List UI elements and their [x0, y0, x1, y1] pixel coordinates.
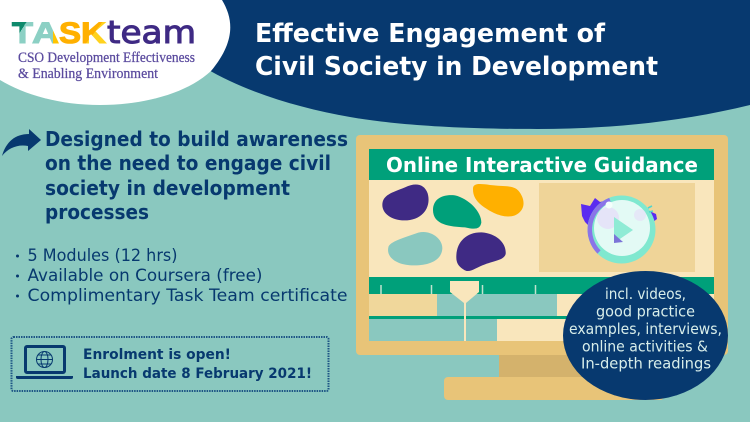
monitor base — [444, 377, 664, 400]
heading: course purpose — [45, 127, 348, 224]
bubble text: examples, interviews, — [569, 320, 722, 338]
logo tagline: CSO Development Effectiveness — [18, 50, 195, 66]
heading: course purpose: Designed to build awareness — [45, 127, 348, 151]
icon: curved arrow — [2, 129, 41, 156]
playhead — [450, 281, 479, 341]
callout text — [83, 347, 312, 382]
logo panel: Task Team — [0, 0, 230, 105]
navy header banner — [200, 0, 750, 129]
callout text: Launch date 8 February 2021! — [83, 366, 312, 382]
monitor stand — [499, 355, 629, 378]
heading: course purpose: on the need to engage civil — [45, 151, 331, 175]
icon: play button — [581, 196, 657, 264]
callout text: Enrolment is open! — [83, 347, 231, 363]
title: Civil Society in Development — [255, 52, 658, 82]
icon: laptop with globe — [16, 346, 73, 379]
bubble text: good practice — [596, 302, 695, 320]
logo wordmark: A — [32, 17, 59, 50]
callout: enrolment — [12, 337, 328, 391]
video panel — [539, 183, 695, 272]
screen header — [369, 149, 714, 180]
logo wordmark: T — [12, 17, 33, 50]
bullet list: Available on Coursera (free) — [28, 266, 262, 286]
timeline divider — [369, 316, 714, 319]
bubble text: In-depth readings — [581, 354, 711, 372]
logo wordmark: K — [81, 17, 106, 50]
logo wordmark: S — [59, 17, 81, 50]
heading: course purpose: society in development — [45, 176, 290, 200]
bubble text — [569, 285, 722, 372]
bubble text: online activities & — [582, 338, 708, 356]
logo tagline — [18, 50, 195, 82]
heading: course purpose: processes — [45, 200, 149, 224]
logo tagline: & Enabling Environment — [18, 66, 158, 82]
title: Effective Engagement of — [255, 19, 606, 49]
logo wordmark — [12, 15, 196, 51]
screen heading: Online Interactive Guidance — [386, 153, 698, 177]
bullet list: Complimentary Task Team certificate — [28, 286, 348, 306]
timeline track 2 — [369, 319, 714, 341]
screen — [369, 149, 714, 341]
title — [255, 19, 658, 82]
timeline track 1 — [369, 294, 714, 316]
bubble text: incl. videos, — [605, 285, 686, 303]
blobs — [382, 184, 524, 271]
timeline bar — [369, 277, 714, 294]
callout bubble: included content — [563, 271, 728, 400]
bullet list — [16, 246, 348, 306]
monitor illustration — [356, 135, 728, 400]
timeline ticks — [381, 285, 536, 294]
bullet list: 5 Modules (12 hrs) — [28, 246, 178, 266]
logo wordmark: team — [107, 15, 196, 51]
monitor frame — [356, 135, 728, 355]
